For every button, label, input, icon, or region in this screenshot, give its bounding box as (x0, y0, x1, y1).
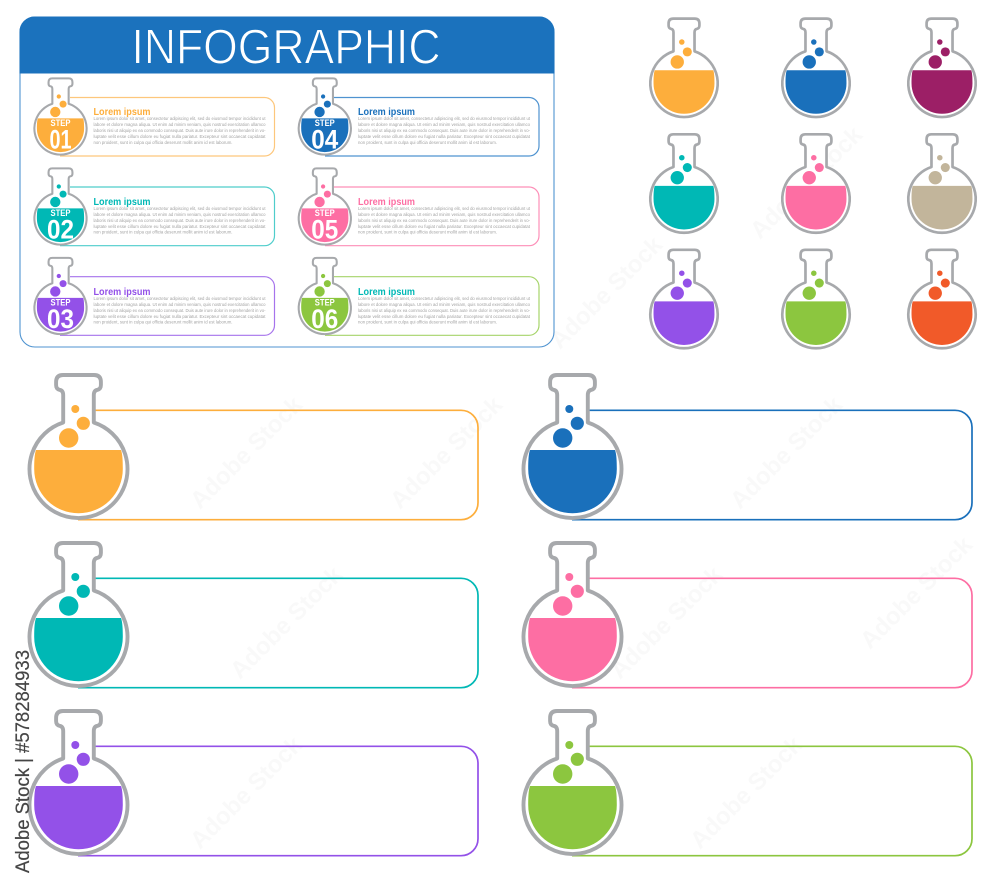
flask: red-orange (908, 250, 976, 348)
background watermark: Adobe Stock (855, 531, 978, 654)
background watermark: Adobe Stock (725, 391, 848, 514)
flask: blue (782, 19, 850, 117)
step 02: Lorem ipsum dolor sit amet, consectetur adipiscing elit, sed do eiusmod tempor incididunt ut (94, 206, 266, 211)
step 01: Lorem ipsum (94, 107, 150, 118)
step 02: luptate velit esse cillum dolore eu fugiat nulla pariatur. Excepteur sint occaecat cupidatat (94, 224, 266, 229)
large blank card: pink (524, 543, 972, 688)
step 03: labore et dolore magna aliqua. Ut enim ad minim veniam, quis nostrud exercitation ullamco (94, 302, 266, 307)
step 04: Lorem ipsum dolor sit amet, consectetur adipiscing elit, sed do eiusmod tempor incididunt ut (358, 116, 531, 121)
large blank card: green (524, 711, 972, 856)
step 05: 05 (311, 214, 338, 244)
step 05: non proident, sunt in culpa qui officia deserunt mollit anim id est laborum. (358, 230, 497, 235)
step 06: STEP (315, 298, 335, 308)
background watermark: Adobe Stock (385, 391, 508, 514)
step 05: Lorem ipsum dolor sit amet, consectetur adipiscing elit, sed do eiusmod tempor incididunt ut (358, 206, 531, 211)
step 04: labore et dolore magna aliqua. Ut enim ad minim veniam, quis nostrud exercitation ullamco (358, 122, 530, 127)
background watermark: Adobe Stock (545, 231, 668, 354)
step 02: STEP (50, 208, 70, 218)
step 03: 03 (47, 304, 74, 334)
step 01: STEP (50, 118, 70, 128)
step 06: Lorem ipsum (358, 287, 415, 298)
step 03 (34, 258, 275, 335)
step 01 (34, 78, 275, 156)
step 03: Lorem ipsum dolor sit amet, consectetur adipiscing elit, sed do eiusmod tempor incididunt ut (94, 296, 266, 301)
large blank card: orange (30, 375, 478, 520)
background watermark: Adobe Stock (605, 561, 728, 684)
title: INFOGRAPHIC (132, 20, 440, 74)
flask: teal (650, 134, 718, 233)
step 05: Lorem ipsum (358, 197, 415, 208)
step 02: non proident, sunt in culpa qui officia deserunt mollit anim id est laborum. (94, 230, 232, 235)
step 01: 01 (50, 124, 72, 154)
flask: green (782, 250, 850, 348)
background watermark: Adobe Stock (745, 121, 868, 244)
background watermark: Adobe Stock (225, 561, 348, 684)
step 02 (34, 168, 275, 246)
step 02: 02 (47, 214, 74, 244)
step 03: STEP (50, 298, 70, 308)
step 01: laboris nisi ut aliquip ex ea commodo consequat. Duis aute irure dolor in reprehenderit in vo- (94, 128, 266, 133)
step 06: labore et dolore magna aliqua. Ut enim ad minim veniam, quis nostrud exercitation ullamco (358, 302, 530, 307)
flask swatch grid (650, 19, 976, 348)
step 06: 06 (311, 304, 338, 334)
step 03: laboris nisi ut aliquip ex ea commodo consequat. Duis aute irure dolor in reprehenderit in vo- (94, 308, 266, 313)
step 04: luptate velit esse cillum dolore eu fugiat nulla pariatur. Excepteur sint occaecat cupidatat (358, 134, 531, 139)
step 04: Lorem ipsum (358, 107, 415, 118)
large blank card: purple (30, 711, 478, 856)
step 01: Lorem ipsum dolor sit amet, consectetur adipiscing elit, sed do eiusmod tempor incididunt ut (94, 116, 266, 121)
flask: tan (908, 134, 976, 233)
step 06 (299, 258, 539, 335)
step 04: laboris nisi ut aliquip ex ea commodo consequat. Duis aute irure dolor in reprehenderit in vo- (358, 128, 530, 133)
flask: pink (782, 134, 850, 233)
background watermark: Adobe Stock (685, 731, 808, 854)
step 02: labore et dolore magna aliqua. Ut enim ad minim veniam, quis nostrud exercitation ullamco (94, 212, 266, 217)
header band (19, 16, 555, 74)
step 02: laboris nisi ut aliquip ex ea commodo consequat. Duis aute irure dolor in reprehenderit in vo- (94, 218, 266, 223)
step 05: laboris nisi ut aliquip ex ea commodo consequat. Duis aute irure dolor in reprehenderit in vo- (358, 218, 530, 223)
step 05 (299, 168, 539, 246)
step 04: STEP (315, 118, 335, 128)
large blank card: blue (524, 375, 972, 520)
step 04 (299, 78, 539, 156)
step 03: non proident, sunt in culpa qui officia deserunt mollit anim id est laborum. (94, 320, 232, 325)
step 04: non proident, sunt in culpa qui officia deserunt mollit anim id est laborum. (358, 140, 497, 145)
background watermark: Adobe Stock (185, 731, 308, 854)
step 03: Lorem ipsum (94, 287, 150, 298)
background watermark (185, 121, 978, 854)
flask: magenta (908, 19, 976, 117)
large blank card: teal (30, 543, 478, 688)
step 01: non proident, sunt in culpa qui officia deserunt mollit anim id est laborum. (94, 140, 232, 145)
flask: purple (650, 250, 718, 348)
step 05: STEP (315, 208, 335, 218)
step 05: labore et dolore magna aliqua. Ut enim ad minim veniam, quis nostrud exercitation ullamco (358, 212, 530, 217)
step 03: luptate velit esse cillum dolore eu fugiat nulla pariatur. Excepteur sint occaecat cupidatat (94, 314, 266, 319)
step 04: 04 (311, 124, 338, 154)
step 01: labore et dolore magna aliqua. Ut enim ad minim veniam, quis nostrud exercitation ullamco (94, 122, 266, 127)
step 06: non proident, sunt in culpa qui officia deserunt mollit anim id est laborum. (358, 320, 497, 325)
stock id side label: Adobe Stock | #578284933 (13, 650, 34, 873)
step 06: laboris nisi ut aliquip ex ea commodo consequat. Duis aute irure dolor in reprehenderit in vo- (358, 308, 530, 313)
panel: infographic card (19, 16, 555, 347)
step 05: luptate velit esse cillum dolore eu fugiat nulla pariatur. Excepteur sint occaecat cupidatat (358, 224, 531, 229)
step 02: Lorem ipsum (94, 197, 150, 208)
step 06: Lorem ipsum dolor sit amet, consectetur adipiscing elit, sed do eiusmod tempor incididunt ut (358, 296, 531, 301)
step 06: luptate velit esse cillum dolore eu fugiat nulla pariatur. Excepteur sint occaecat cupidatat (358, 314, 531, 319)
flask: orange (650, 19, 718, 117)
background watermark: Adobe Stock (185, 391, 308, 514)
step 01: luptate velit esse cillum dolore eu fugiat nulla pariatur. Excepteur sint occaecat cupidatat (94, 134, 266, 139)
